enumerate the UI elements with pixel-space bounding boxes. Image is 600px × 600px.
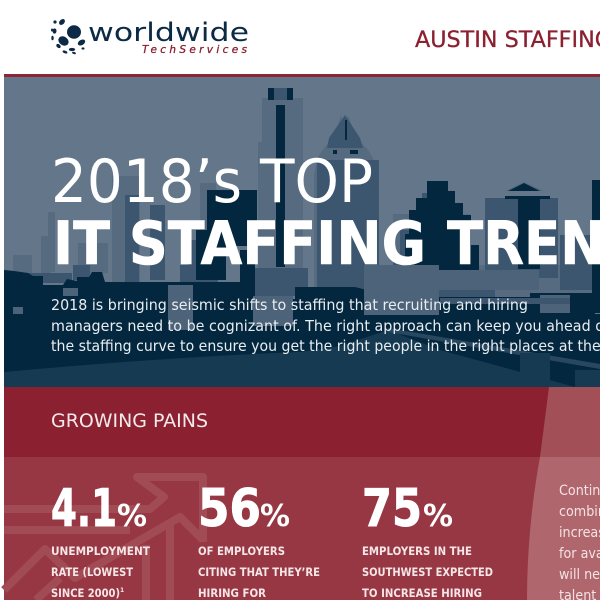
stat: 75%: 75 xyxy=(362,479,422,539)
hero paragraph xyxy=(51,296,600,355)
stat: 75%: % xyxy=(423,499,453,534)
logo: worldwide TechServices xyxy=(51,18,249,56)
stat: 75%: SOUTHWEST EXPECTED xyxy=(362,565,493,579)
stat: 4.1%: % xyxy=(117,499,147,534)
logo: worldwide TechServices: TechServices xyxy=(142,44,248,56)
side panel text xyxy=(559,482,600,600)
stat: 75%: TO INCREASE HIRING xyxy=(362,586,482,600)
stat: 56%: CITING THAT THEY’RE xyxy=(198,565,320,579)
skyline dark layer xyxy=(4,88,600,399)
stat: 75%: EMPLOYERS IN THE xyxy=(362,544,472,558)
stat: 56% xyxy=(198,479,320,600)
header rule xyxy=(4,74,600,77)
skyline mid layer xyxy=(24,88,600,325)
stat: 56%: HIRING FOR xyxy=(198,586,266,600)
stat: 56%: % xyxy=(260,499,290,534)
section heading: GROWING PAINS xyxy=(51,411,208,432)
hero panel xyxy=(4,77,600,399)
hero paragraph: 2018 is bringing seismic shifts to staffing that recruiting and hiring xyxy=(51,296,528,314)
arrows background graphic xyxy=(4,477,203,600)
stat: 4.1%: 1 xyxy=(120,587,124,594)
stat: 4.1%: 4.1 xyxy=(51,479,117,539)
skyline back layer xyxy=(13,98,600,305)
panel: growing pains xyxy=(4,387,600,600)
header bar xyxy=(0,0,600,74)
stat: 4.1%: UNEMPLOYMENT xyxy=(51,544,150,558)
road xyxy=(4,330,575,387)
stat: 56%: OF EMPLOYERS xyxy=(198,544,285,558)
hero title: 2018’s TOP xyxy=(51,147,373,217)
stat: 4.1%: RATE (LOWEST xyxy=(51,565,133,579)
side panel xyxy=(527,387,600,600)
logo: worldwide TechServices: worldwide xyxy=(88,18,249,48)
stat: 75% xyxy=(362,479,493,600)
stat: 56%: 56 xyxy=(198,479,261,539)
stat: 4.1%: SINCE 2000) xyxy=(51,586,120,600)
stat: 4.1% xyxy=(51,479,150,600)
skyline foreground blocks xyxy=(13,265,570,330)
hero title: IT STAFFING xyxy=(53,209,426,279)
hero title xyxy=(51,147,600,279)
road shading xyxy=(388,328,600,387)
